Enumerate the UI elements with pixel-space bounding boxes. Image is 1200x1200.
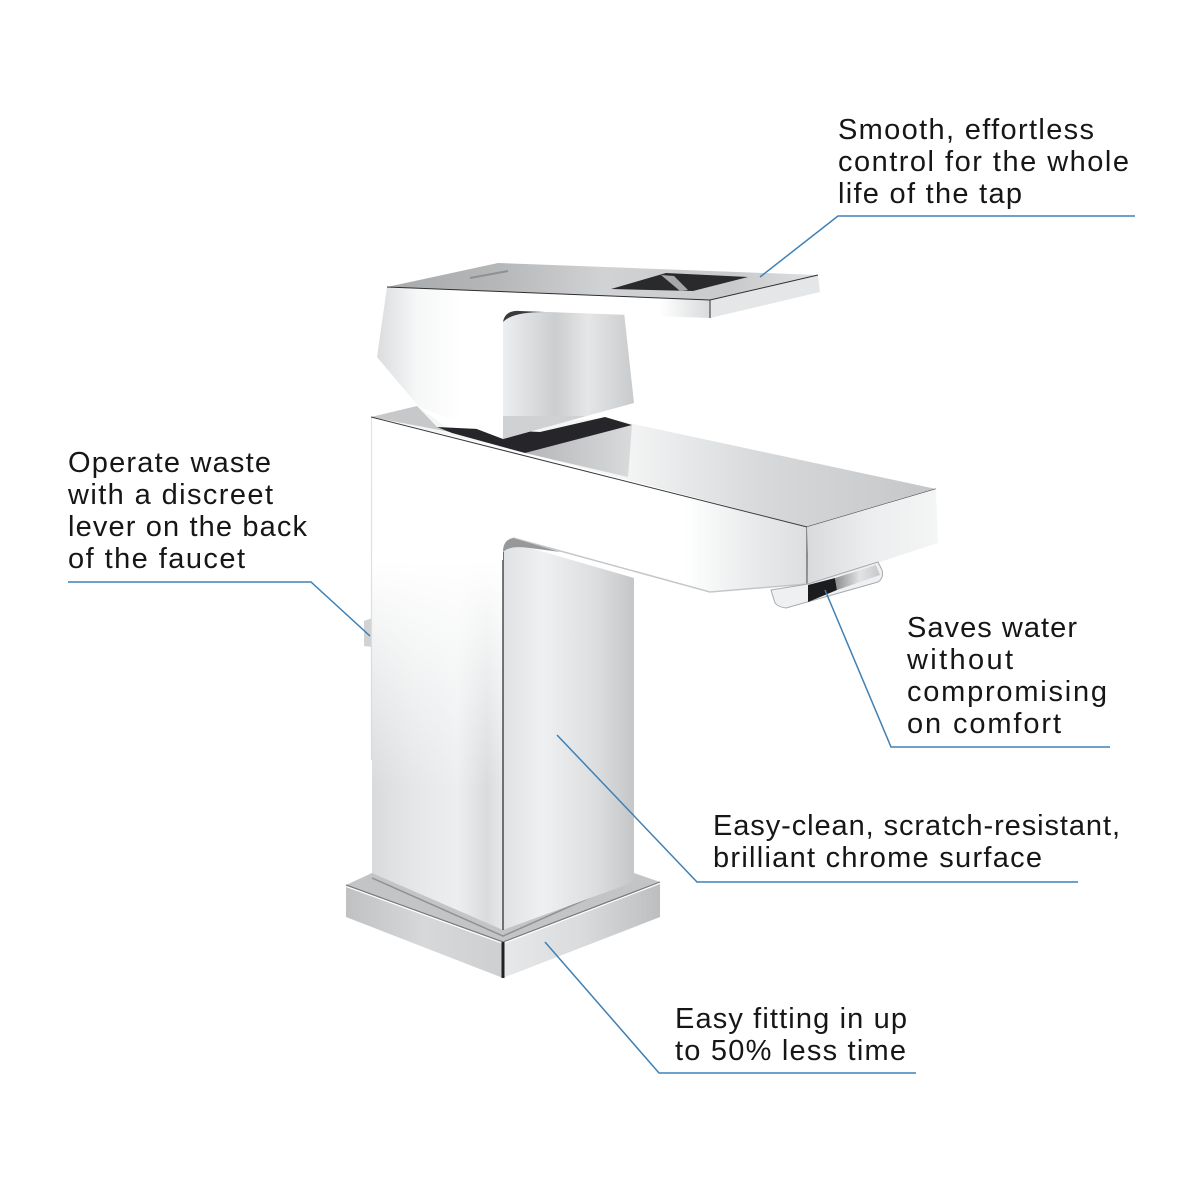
spout lower edge highlight	[513, 538, 807, 592]
handle cube right face	[503, 312, 634, 439]
callout text: Operate waste	[68, 447, 271, 479]
callout text: without	[906, 644, 1013, 676]
leader line	[545, 942, 916, 1073]
callout text: with a discreet	[67, 479, 273, 511]
callout: chrome surface	[557, 735, 1120, 882]
callout text: lever on the back	[68, 511, 308, 543]
faucet column	[372, 480, 634, 930]
callout text: Smooth, effortless	[838, 114, 1094, 146]
lever square opening	[611, 273, 748, 291]
spout end face	[807, 489, 938, 584]
spout outlines	[371, 417, 936, 584]
callout text: Easy-clean, scratch-resistant,	[713, 810, 1120, 842]
callout: lever control	[760, 114, 1135, 277]
lever outline	[387, 275, 818, 318]
handle top surface	[387, 263, 818, 300]
drain lever knob	[364, 618, 372, 647]
callout: waste lever	[67, 447, 370, 636]
handle cube lower reflection	[503, 416, 586, 439]
leader line	[760, 216, 1135, 277]
column left edge	[370, 418, 372, 760]
faucet illustration	[346, 263, 938, 978]
callout text: of the faucet	[68, 543, 245, 575]
callout text: Easy fitting in up	[675, 1003, 907, 1035]
handle inner dark edge	[503, 311, 545, 322]
callout: easy fitting	[545, 942, 916, 1073]
callout: water saving	[825, 590, 1110, 747]
leader line	[68, 582, 370, 636]
leader line	[557, 735, 1078, 882]
brand mark	[470, 271, 508, 278]
callout text: Saves water	[907, 612, 1077, 644]
spout inner shadow	[503, 538, 560, 552]
callout text: on comfort	[907, 708, 1061, 740]
callout text: compromising	[907, 676, 1107, 708]
callout text: brilliant chrome surface	[713, 842, 1042, 874]
faucet base plate	[346, 873, 660, 978]
callout text: control for the whole	[838, 146, 1129, 178]
callout text: life of the tap	[838, 178, 1022, 210]
leader line	[825, 590, 1110, 747]
spout side	[371, 417, 807, 592]
handle cube left face	[377, 287, 710, 439]
callout text: to 50% less time	[675, 1035, 906, 1067]
lever front tip	[710, 275, 820, 318]
spout top surface	[371, 406, 936, 527]
aerator	[771, 562, 882, 608]
